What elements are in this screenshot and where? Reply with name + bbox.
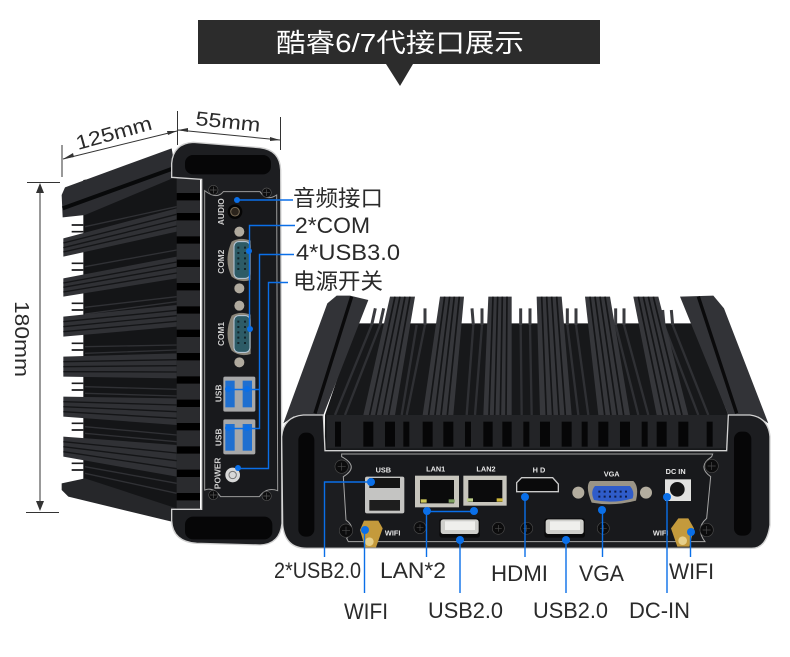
dimension: 180mm height: 180mm (10, 301, 32, 377)
USB 3.0 lower pair (213, 419, 255, 454)
COM1 port (216, 301, 251, 367)
label: 4*USB3.0: 4*USB3.0 (296, 240, 400, 265)
COM1 port: COM1 (216, 322, 226, 346)
audio jack: AUDIO (216, 198, 226, 225)
bottom flange (62, 478, 177, 525)
DC power jack (665, 467, 691, 501)
plate screws (209, 185, 271, 501)
VGA port: VGA (604, 470, 620, 479)
COM2 port: COM2 (216, 249, 226, 274)
LAN1 port: LAN1 (426, 465, 445, 474)
label: 2*USB2.0: 2*USB2.0 (274, 558, 361, 583)
label: WIFI left: WIFI (344, 599, 388, 624)
stacked USB 2.0 port: USB (376, 466, 391, 475)
LAN1 port (415, 465, 459, 507)
left flange (283, 296, 368, 423)
front face (172, 142, 282, 545)
LAN2 port: LAN2 (476, 465, 496, 474)
dimension: 125mm depth (62, 113, 177, 177)
right vent slot (734, 432, 751, 536)
dimension: 55mm width (178, 108, 280, 150)
tall fin stripes (63, 214, 177, 469)
side view device (62, 142, 282, 545)
blue callout leaders: front view (324, 478, 695, 593)
USB 3.0 upper pair (213, 377, 255, 412)
top flange groove (63, 168, 173, 208)
dimension: 180mm height (10, 182, 60, 512)
plate screws (335, 459, 718, 537)
fin base band (327, 415, 727, 448)
HDMI port: H D (533, 466, 545, 475)
LAN2 port (463, 465, 507, 506)
fin stripes (370, 297, 682, 415)
HDMI port (517, 466, 558, 492)
port plate outline (342, 454, 713, 542)
short fin spikes (372, 308, 673, 325)
label: 2*COM: 2*COM (295, 213, 370, 238)
title banner: 酷睿6/7代接口展示 (276, 28, 524, 58)
label: power switch: 电源开关 (293, 269, 383, 294)
VGA port (572, 470, 652, 504)
fin base notches (335, 422, 713, 447)
USB 3.0 lower pair: USB (213, 429, 223, 446)
WIFI antenna connector left (360, 521, 400, 547)
port plate outline (205, 191, 278, 497)
stacked USB 2.0 port (365, 466, 404, 513)
power button: POWER (213, 458, 223, 489)
lower USB 2.0 port right (544, 518, 585, 538)
top vent slot (185, 155, 271, 174)
heat sink body (72, 163, 200, 513)
label: USB2.0 right: USB2.0 (533, 598, 608, 623)
label: audio jack: 音频接口 (293, 186, 383, 211)
label: VGA: VGA (579, 561, 624, 586)
label: USB2.0 left: USB2.0 (428, 598, 503, 623)
blue callout leaders: side view (225, 197, 295, 471)
dimension: 55mm width: 55mm (194, 108, 261, 137)
tall fin blocks (63, 208, 177, 477)
front view device (282, 296, 770, 548)
COM2 port (216, 227, 251, 293)
power button (213, 458, 240, 489)
WIFI antenna connector right: WIFI (653, 529, 668, 538)
top flange (62, 148, 177, 217)
DC power jack: DC IN (666, 467, 686, 476)
USB 3.0 upper pair: USB (213, 385, 223, 402)
front face (282, 415, 770, 548)
tall fin groups (363, 297, 688, 415)
right flange (680, 296, 768, 423)
dimension: 125mm depth: 125mm (73, 113, 154, 155)
label: DC-IN: DC-IN (629, 598, 690, 623)
WIFI antenna connector right (653, 518, 694, 547)
label: LAN*2: LAN*2 (380, 558, 446, 583)
heat sink back (325, 323, 728, 450)
flange creases (315, 297, 737, 413)
left vent slot (298, 433, 314, 537)
WIFI antenna connector left: WIFI (385, 529, 400, 538)
lower USB 2.0 port left (439, 518, 480, 538)
title banner (198, 20, 600, 86)
audio jack (216, 198, 242, 225)
bottom vent slot (185, 517, 272, 539)
label: HDMI: HDMI (491, 561, 548, 586)
label: WIFI right: WIFI (669, 559, 714, 584)
between-fin highlights (335, 325, 708, 415)
